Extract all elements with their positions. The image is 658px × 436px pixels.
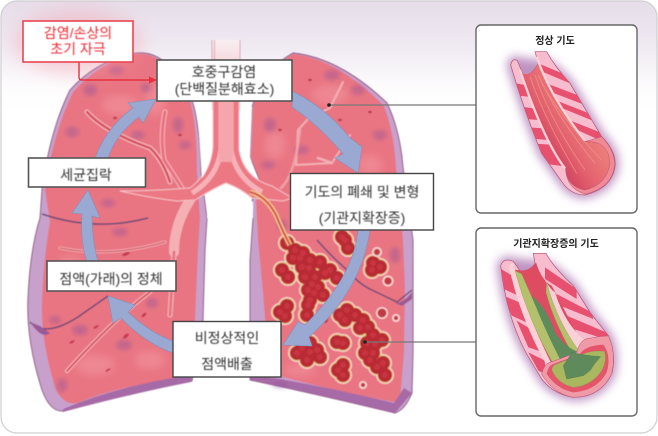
- connector line to diseased airway: [363, 340, 476, 344]
- arrow: to mucus retention: [108, 296, 173, 353]
- callout: initial stimulus: [14, 10, 157, 84]
- white gap under the carina: [207, 186, 253, 218]
- diseased right bronchus: [250, 192, 290, 245]
- right lung blotches: [261, 70, 400, 388]
- left lung bottom rim: [63, 375, 192, 412]
- arrow: to neutrophil infection: [95, 99, 156, 158]
- trachea: [212, 40, 240, 110]
- right lung bottom rim: [250, 374, 412, 413]
- box: airway obstruction and deformation: (기관지확장증): [319, 210, 405, 226]
- callout: initial stimulus: 초기 자극: [50, 41, 106, 57]
- right lung specks: [278, 79, 372, 131]
- box: abnormal mucus discharge: 점액배출: [201, 356, 253, 372]
- box: abnormal mucus discharge: 비정상적인: [195, 330, 259, 346]
- right bronchial branches: [281, 82, 350, 188]
- panel title: bronchiectasis airway: 기관지확장증의 기도: [513, 237, 599, 250]
- bronchiectasis: dilated airways: [280, 237, 400, 389]
- box: abnormal mucus discharge: [173, 322, 281, 377]
- panel: bronchiectasis airway: [476, 228, 637, 416]
- box: neutrophil infection: [157, 60, 292, 101]
- box: bacterial colonization: 세균집락: [60, 167, 112, 183]
- connector line to normal airway: [327, 103, 476, 107]
- panel: normal airway: [476, 25, 637, 213]
- white gaps beside trachea: [197, 100, 212, 178]
- box: bacterial colonization: [28, 158, 146, 187]
- bronchial tree: [120, 100, 292, 245]
- left bronchial branches: [60, 112, 190, 371]
- icon: normal airway tube: [507, 52, 615, 195]
- left lung lighter patches: [56, 84, 165, 375]
- right lung: [250, 53, 413, 413]
- callout: initial stimulus: 감염/손상의: [44, 25, 112, 41]
- right lung fissure: [317, 240, 412, 302]
- box: mucus retention: [47, 261, 176, 291]
- icon: diseased airway tube: [498, 253, 614, 397]
- left lung fissures: [42, 214, 148, 224]
- arrow: to abnormal mucus discharge: [283, 229, 370, 346]
- panel title: normal airway: 정상 기도: [535, 34, 575, 47]
- small isolated airways: [322, 247, 400, 389]
- right lung lighter patches: [265, 85, 382, 376]
- left lung blotches: [49, 66, 191, 392]
- box: mucus retention: 점액(가래)의 정체: [59, 271, 163, 287]
- box: neutrophil infection: 호중구감염: [192, 64, 256, 80]
- left lung: [28, 53, 207, 412]
- left lung specks: [69, 117, 182, 372]
- box: airway obstruction and deformation: [290, 174, 434, 230]
- box: neutrophil infection: (단백질분해효소): [175, 81, 274, 97]
- arrow: to airway obstruction: [292, 91, 362, 173]
- arrow: to bacterial colonization: [72, 190, 100, 262]
- illustration: lungs: [28, 40, 413, 413]
- box: airway obstruction and deformation: 기도의 폐쇄 및 변형: [305, 184, 419, 200]
